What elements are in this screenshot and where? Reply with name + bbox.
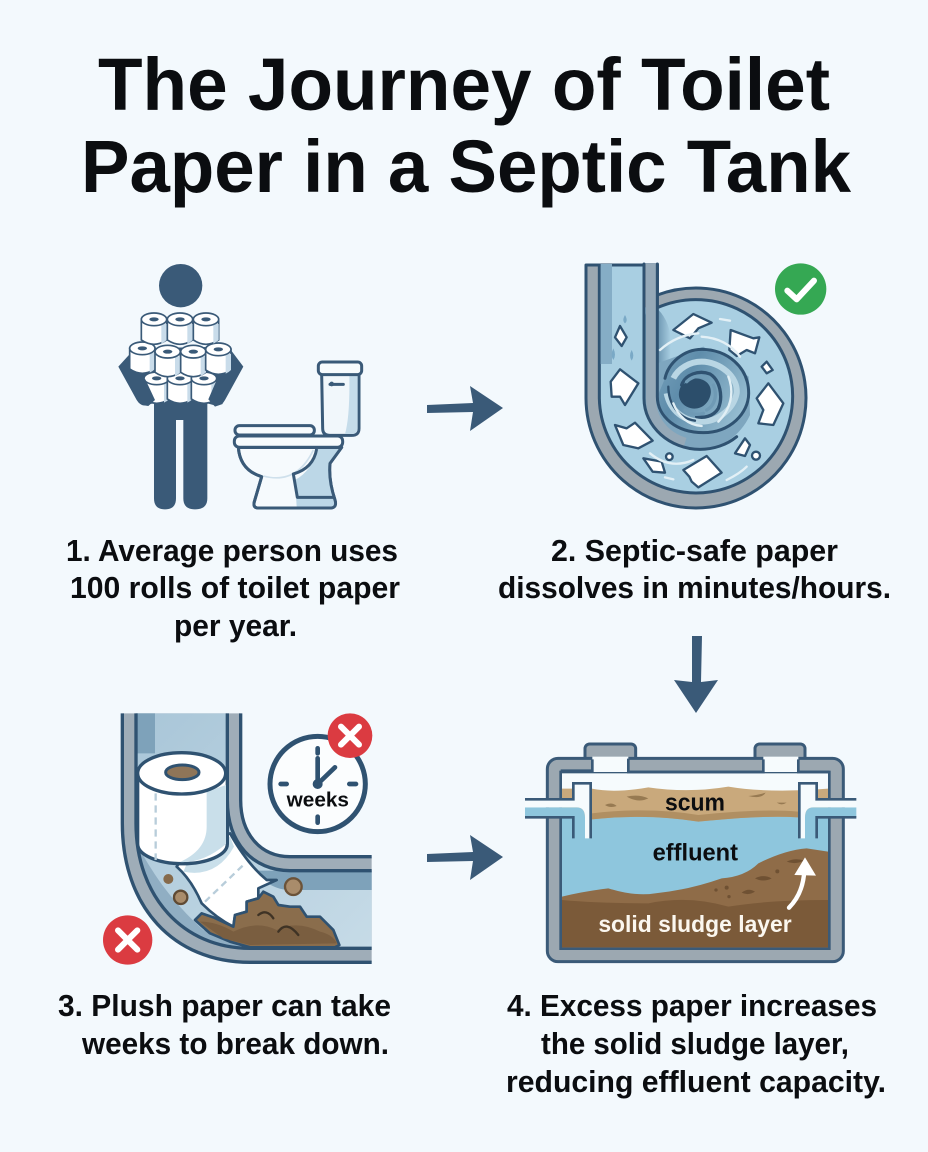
icon: person: [118, 264, 243, 509]
inlet pipe: [525, 783, 591, 838]
caption: step 1: 100 rolls of toilet paper: [70, 570, 400, 605]
panel: septic-safe paper swirl: [586, 263, 826, 508]
tank labels: solid sludge layer: [598, 911, 792, 937]
icon: green check badge: [775, 263, 826, 315]
swirl vortex: [644, 264, 750, 449]
arrow: sludge rising: [789, 857, 816, 908]
paper tail: [177, 833, 277, 927]
sludge clump: [163, 874, 339, 947]
caption: step 1: per year.: [174, 608, 297, 643]
panel: flush paper clog: [103, 713, 372, 965]
tank shell: [547, 744, 843, 962]
tank labels: effluent: [653, 839, 738, 866]
paper fragments: [611, 314, 783, 487]
caption: step 1: 1. Average person uses: [66, 533, 398, 568]
icon: hands over rolls: [139, 375, 223, 407]
effluent water: [562, 810, 828, 897]
tank labels: [598, 790, 792, 937]
water droplets and highlights: [612, 315, 747, 480]
toilet paper roll: [138, 753, 227, 864]
caption: step 2: dissolves in minutes/hours.: [498, 570, 891, 605]
caption: step 3: [58, 988, 391, 1061]
caption: step 4: the solid sludge layer,: [541, 1026, 849, 1061]
icon: toilet paper rolls: [130, 313, 231, 403]
caption: step 1: [66, 533, 400, 643]
caption: step 2: [498, 533, 891, 605]
caption: step 4: [506, 988, 886, 1099]
caption: step 4: 4. Excess paper increases: [507, 988, 877, 1023]
icon: red cross badge on clock: [328, 713, 372, 758]
pipe body: [586, 264, 806, 508]
icon: red cross badge: [103, 915, 152, 965]
title: Paper in a Septic Tank: [81, 125, 852, 208]
icon: clock: [270, 736, 365, 832]
panel: person holding rolls beside toilet: [118, 264, 362, 509]
icon: clock: weeks: [286, 789, 349, 812]
sludge layer: [562, 848, 828, 947]
arrow: step 1 to step 2: [427, 386, 503, 431]
caption: step 2: 2. Septic-safe paper: [551, 533, 838, 568]
title: [81, 43, 852, 208]
arrow: step 3 to step 4: [427, 835, 503, 880]
outlet pipe: [799, 783, 856, 838]
scum layer: [562, 787, 828, 822]
caption: step 4: reducing effluent capacity.: [506, 1064, 886, 1099]
tank labels: scum: [665, 790, 725, 817]
panel: septic tank cross-section: [525, 744, 856, 962]
title: The Journey of Toilet: [98, 43, 830, 126]
arrow: step 2 to tank: [674, 636, 718, 713]
caption: step 3: weeks to break down.: [81, 1026, 389, 1061]
icon: toilet: [234, 362, 362, 508]
clogged pipe: [122, 713, 372, 962]
caption: step 3: 3. Plush paper can take: [58, 988, 391, 1023]
